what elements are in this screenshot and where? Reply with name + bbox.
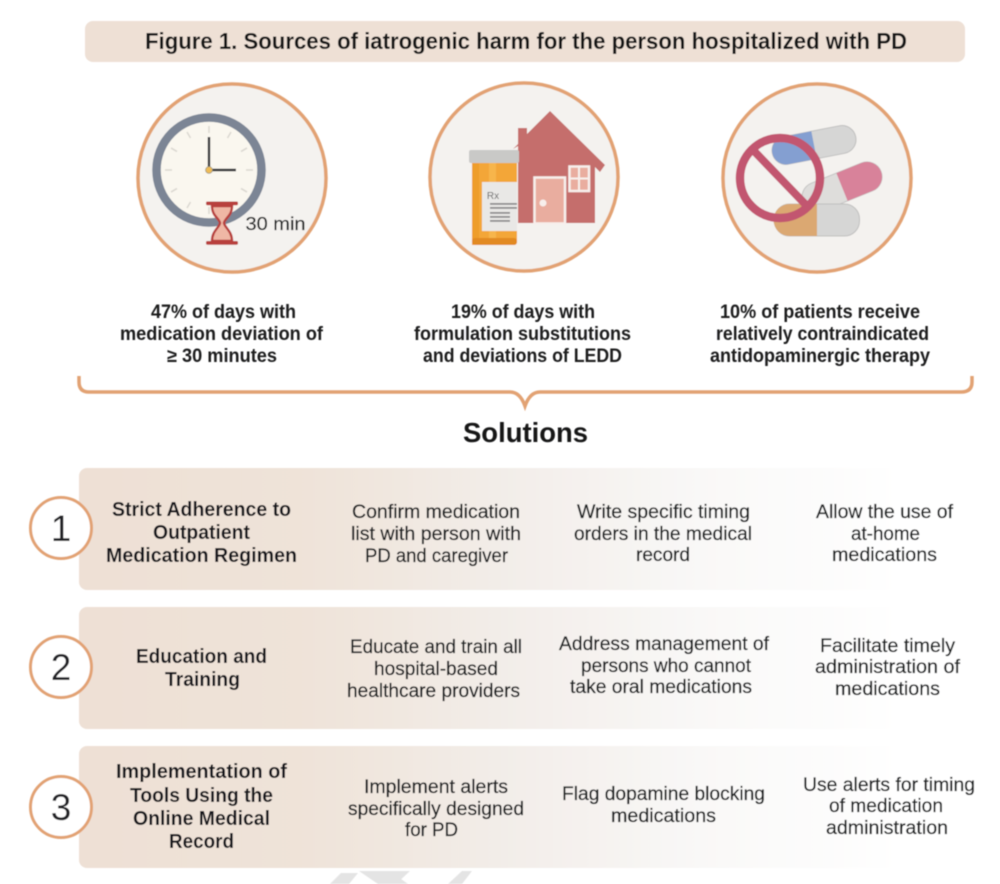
solution 2 item 2 xyxy=(559,633,770,698)
icon: clock with hourglass: 30 min xyxy=(246,213,306,234)
solution 1 item 3: at-home xyxy=(851,523,920,545)
solution 1 heading: Outpatient xyxy=(153,521,250,544)
solution 3 item 2 xyxy=(562,783,765,827)
solution 2 item 2: take oral medications xyxy=(570,676,752,698)
solution 1 item 3: medications xyxy=(832,544,937,566)
solution 1 item 2: orders in the medical xyxy=(574,523,752,545)
icon: crossed out pills xyxy=(723,84,911,272)
stat: contraindicated therapy: relatively contraindicated xyxy=(716,324,929,345)
solution 2 item 3: medications xyxy=(835,678,940,700)
stat: formulation substitutions: formulation substitutions xyxy=(414,324,631,345)
solution 3 item 1: Implement alerts xyxy=(364,776,508,798)
solution 3 heading: Implementation of xyxy=(116,760,287,783)
number 3 xyxy=(30,776,92,838)
solution 2 item 1: healthcare providers xyxy=(347,680,520,702)
stat: formulation substitutions xyxy=(414,302,631,367)
panel: solution 1 xyxy=(30,468,1000,590)
solution 3 item 2: medications xyxy=(611,805,716,827)
panel: solution 3 xyxy=(30,746,1000,868)
solution 3 heading: Tools Using the xyxy=(130,784,273,807)
solution 2 heading: Education and xyxy=(136,645,267,668)
number 2 xyxy=(30,636,92,698)
title bar: Figure 1. Sources of iatrogenic harm for the person hospitalized with PD xyxy=(145,28,907,54)
solution 1 item 2 xyxy=(574,501,752,566)
solution 1 item 2: Write specific timing xyxy=(577,501,750,523)
solution 3 item 1: for PD xyxy=(405,819,458,841)
solution 1 item 1 xyxy=(351,501,521,567)
solution 1 item 3: Allow the use of xyxy=(816,501,954,523)
solution 1 heading xyxy=(106,498,297,567)
solution 3 item 1 xyxy=(348,776,524,841)
stat: medication deviation xyxy=(120,302,324,367)
solution 1 item 1: list with person with xyxy=(351,523,521,545)
solution 3 heading: Record xyxy=(169,830,234,853)
stat: formulation substitutions: 19% of days with xyxy=(451,302,595,323)
solution 3 item 3: administration xyxy=(826,817,948,839)
number 1: 1 xyxy=(51,508,71,549)
solution 2 heading: Training xyxy=(165,668,240,691)
stat: contraindicated therapy: antidopaminergic therapy xyxy=(710,346,930,367)
solution 2 heading xyxy=(136,645,267,691)
brace xyxy=(79,376,972,406)
number 1 xyxy=(30,498,92,558)
solution 3 item 3 xyxy=(803,774,975,839)
solution 1 item 1: Confirm medication xyxy=(352,501,520,523)
stat: contraindicated therapy: 10% of patients receive xyxy=(720,302,920,323)
icon: pill bottle and house xyxy=(430,83,618,271)
solution 3 item 3: Use alerts for timing xyxy=(803,774,975,796)
number 3: 3 xyxy=(51,787,71,828)
heading: solutions: Solutions xyxy=(463,417,588,448)
solution 1 item 3 xyxy=(816,501,954,566)
panel: solution 2 xyxy=(30,607,1000,729)
solution 3 item 2: Flag dopamine blocking xyxy=(562,783,765,805)
solution 3 heading xyxy=(116,760,287,853)
number 2: 2 xyxy=(51,647,71,688)
solution 2 item 1: Educate and train all xyxy=(350,636,522,658)
watermark fragment xyxy=(330,871,472,884)
stat: contraindicated therapy xyxy=(710,302,930,367)
solution 1 heading: Medication Regimen xyxy=(106,544,297,567)
title bar xyxy=(85,21,965,62)
solution 1 item 1: PD and caregiver xyxy=(365,545,508,567)
solution 2 item 1: hospital-based xyxy=(374,658,498,680)
stat: medication deviation: ≥ 30 minutes xyxy=(167,346,277,367)
solution 2 item 1 xyxy=(347,636,522,702)
stat: medication deviation: 47% of days with xyxy=(151,302,296,323)
stat: medication deviation: medication deviation of xyxy=(120,324,324,345)
icon: pill bottle and house: Rx xyxy=(487,191,499,202)
solution 2 item 2: persons who cannot xyxy=(581,655,752,677)
solution 2 item 3 xyxy=(815,635,961,700)
solution 2 item 2: Address management of xyxy=(559,633,770,655)
solution 1 heading: Strict Adherence to xyxy=(112,498,291,521)
stat: formulation substitutions: and deviations of LEDD xyxy=(423,346,622,367)
solution 1 item 2: record xyxy=(636,544,690,566)
solution 3 item 1: specifically designed xyxy=(348,798,524,820)
solution 2 item 3: administration of xyxy=(815,656,961,678)
solution 3 item 3: of medication xyxy=(829,795,943,817)
solution 2 item 3: Facilitate timely xyxy=(820,635,955,657)
solution 3 heading: Online Medical xyxy=(133,807,270,830)
icon: clock with hourglass xyxy=(138,84,326,272)
